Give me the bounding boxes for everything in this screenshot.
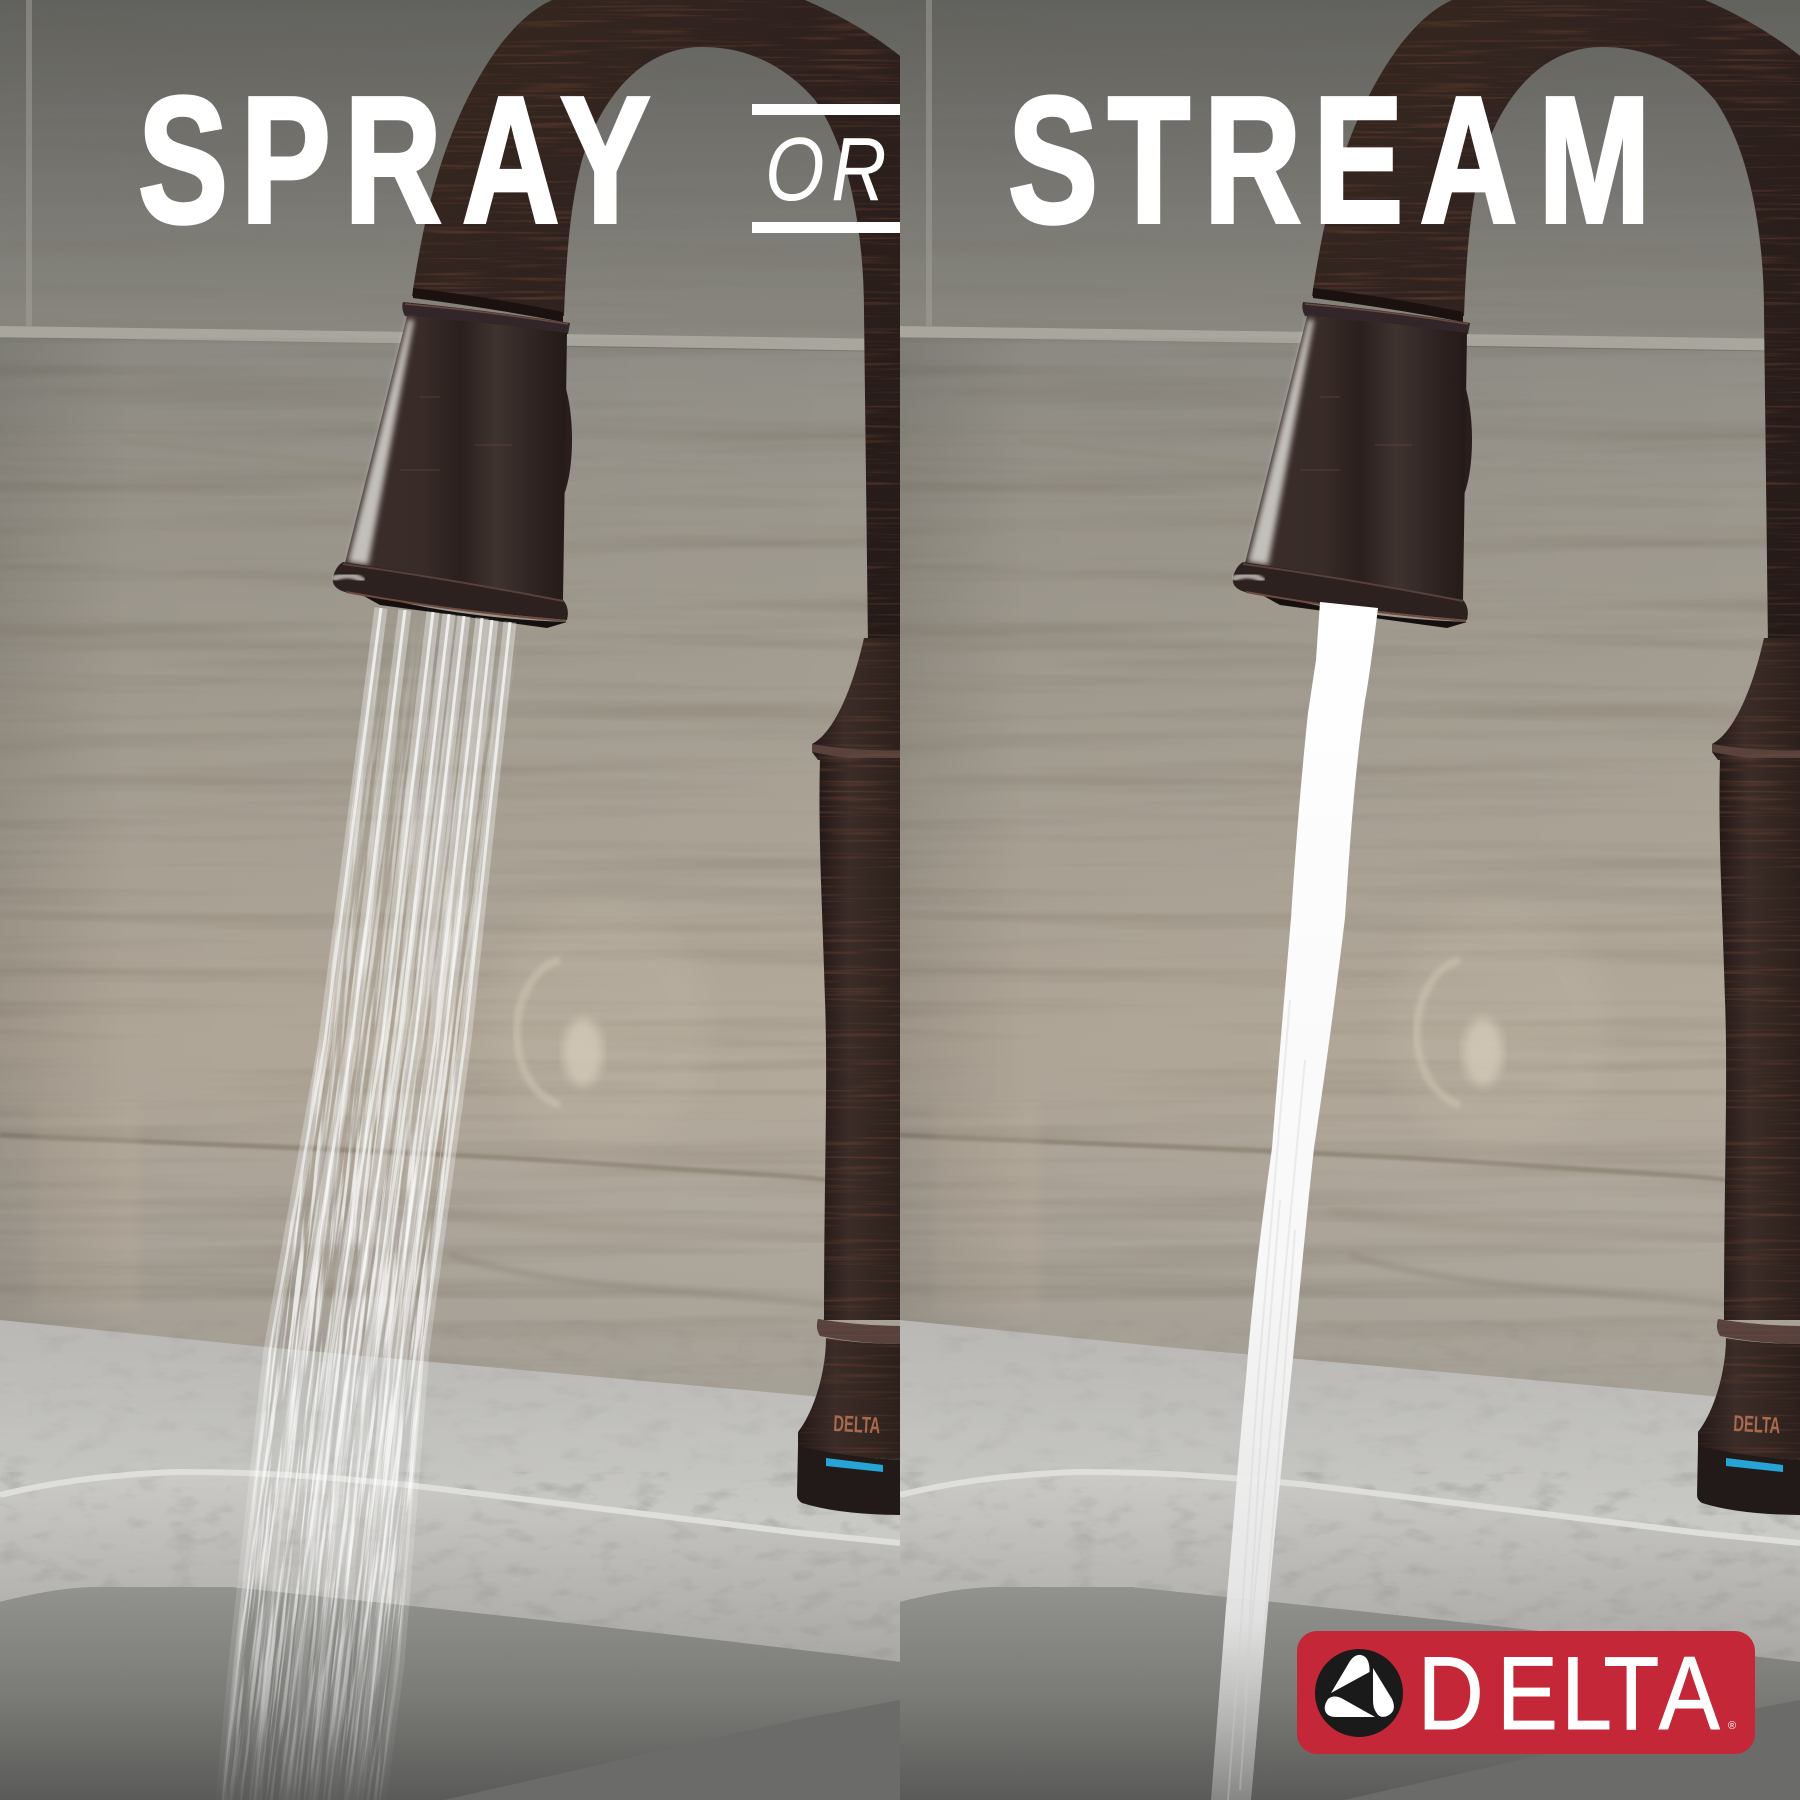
icon: blue indicator light (826, 1458, 883, 1472)
separate water jets (222, 608, 510, 1800)
divider label: OR (752, 104, 900, 233)
faucet base with indicator light (797, 1410, 905, 1515)
heading: SPRAY: SPRAY (138, 59, 650, 260)
spray head (333, 288, 572, 628)
stream texture lines (1228, 1000, 1305, 1800)
fine droplets texture (222, 646, 516, 1800)
tiled wall (0, 0, 900, 1420)
registered mark: ® (1728, 1720, 1736, 1732)
countertop (0, 1320, 900, 1662)
logo wordmark: DELTA (1418, 1635, 1720, 1751)
panel: stream photo (900, 0, 1800, 1800)
kitchen scene: wall, counter, sink and faucet (0, 0, 905, 1800)
icon: Delta triangle mark (1315, 1649, 1403, 1737)
water: spray pattern (222, 607, 516, 1800)
logo: Delta badge (1297, 1631, 1755, 1754)
gooseneck arch (412, 0, 905, 645)
divider label: OR: OR (765, 118, 887, 219)
sink basin (0, 1587, 900, 1800)
water: solid stream (1211, 602, 1378, 1800)
faucet spout and body (412, 0, 905, 1460)
kitchen scene repeated (900, 0, 1800, 1800)
panel: spray photo (0, 0, 900, 1800)
lower faucet body (798, 638, 905, 1460)
heading: STREAM: STREAM (1008, 59, 1651, 260)
